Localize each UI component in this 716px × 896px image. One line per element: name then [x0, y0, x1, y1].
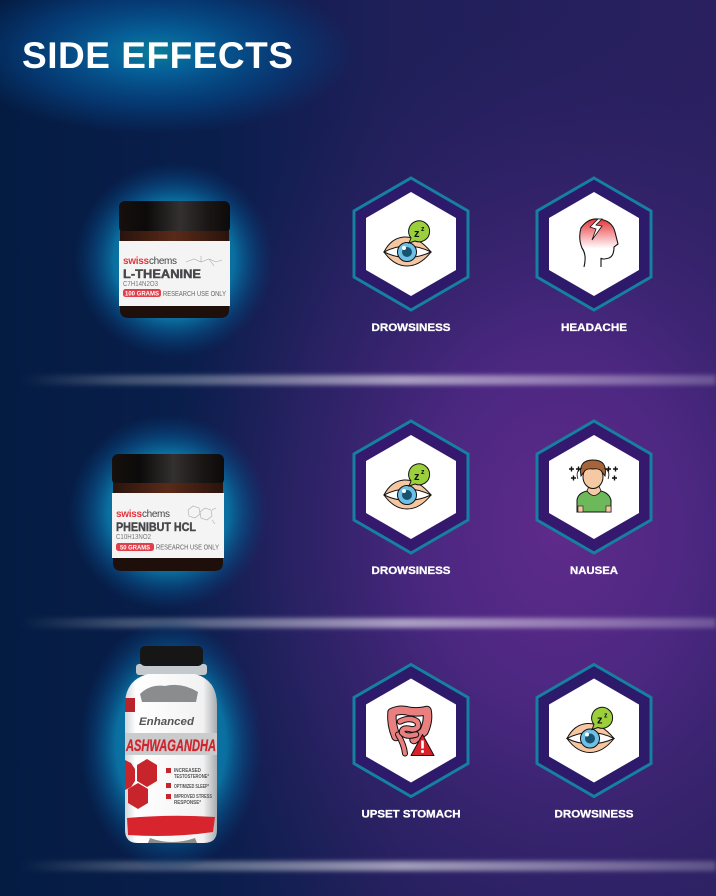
- product: L-Theanine jar: swiss: [123, 256, 149, 267]
- label: NAUSEA: [570, 565, 618, 577]
- product: Ashwagandha bottle: INCREASED: [174, 768, 201, 774]
- row 3: drowsiness hexagon: [537, 664, 651, 820]
- divider 3: [20, 861, 716, 871]
- icon: dizzy person: [569, 460, 618, 512]
- icon: drowsy eye: z: [421, 226, 425, 233]
- product: Phenibut HCL jar: [68, 414, 268, 610]
- product: Ashwagandha bottle: OPTIMIZED SLEEP*: [174, 784, 209, 790]
- product: L-Theanine jar: RESEARCH USE ONLY: [163, 291, 226, 298]
- product: Phenibut HCL jar: 50 GRAMS: [120, 544, 151, 552]
- icon: drowsy eye: z: [597, 714, 603, 726]
- product: L-Theanine jar: C7H14N2O3: [123, 281, 158, 288]
- row 1: drowsiness hexagon: [354, 178, 468, 334]
- icon: drowsy eye: z: [414, 471, 420, 483]
- icon: headache: [580, 219, 618, 267]
- icon: drowsy eye: [384, 221, 431, 266]
- product: Phenibut HCL jar: RESEARCH USE ONLY: [156, 544, 219, 552]
- product: Ashwagandha bottle: RESPONSE*: [174, 800, 201, 806]
- row 3: upset stomach hexagon: [354, 664, 468, 820]
- product: L-Theanine jar: 100 GRAMS: [125, 290, 160, 298]
- product: Phenibut HCL jar: PHENIBUT HCL: [116, 520, 196, 534]
- title: SIDE EFFECTS: [22, 35, 293, 76]
- row 2: drowsiness hexagon: [354, 421, 468, 577]
- product: L-Theanine jar: chems: [149, 256, 177, 267]
- product: Phenibut HCL jar: swiss: [116, 509, 142, 520]
- label: DROWSINESS: [372, 565, 450, 577]
- icon: drowsy eye: [384, 464, 431, 509]
- product: Ashwagandha bottle: IMPROVED STRESS: [174, 794, 213, 800]
- label: HEADACHE: [561, 322, 627, 334]
- icon: intestines with warning: [392, 710, 434, 756]
- divider 1: [20, 375, 716, 385]
- product: Ashwagandha bottle: Enhanced: [139, 716, 194, 728]
- icon: drowsy eye: z: [414, 228, 420, 240]
- product: L-Theanine jar: [74, 162, 274, 358]
- title glow: [0, 0, 355, 134]
- row 2: nausea hexagon: [537, 421, 651, 577]
- product: Phenibut HCL jar: chems: [142, 509, 170, 520]
- product: Phenibut HCL jar: C10H13NO2: [116, 534, 151, 541]
- icon: drowsy eye: z: [421, 469, 425, 476]
- icon: drowsy eye: [567, 707, 614, 752]
- label: DROWSINESS: [554, 808, 634, 820]
- label: DROWSINESS: [372, 322, 450, 334]
- divider 2: [20, 618, 716, 628]
- product: Ashwagandha bottle: [79, 617, 263, 873]
- product: L-Theanine jar: L-THEANINE: [123, 267, 201, 281]
- product: Ashwagandha bottle: ASHWAGANDHA: [125, 736, 216, 755]
- product: Ashwagandha bottle: TESTOSTERONE*: [174, 774, 209, 780]
- icon: drowsy eye: z: [604, 712, 608, 720]
- row 1: headache hexagon: [537, 178, 651, 334]
- label: UPSET STOMACH: [362, 808, 461, 820]
